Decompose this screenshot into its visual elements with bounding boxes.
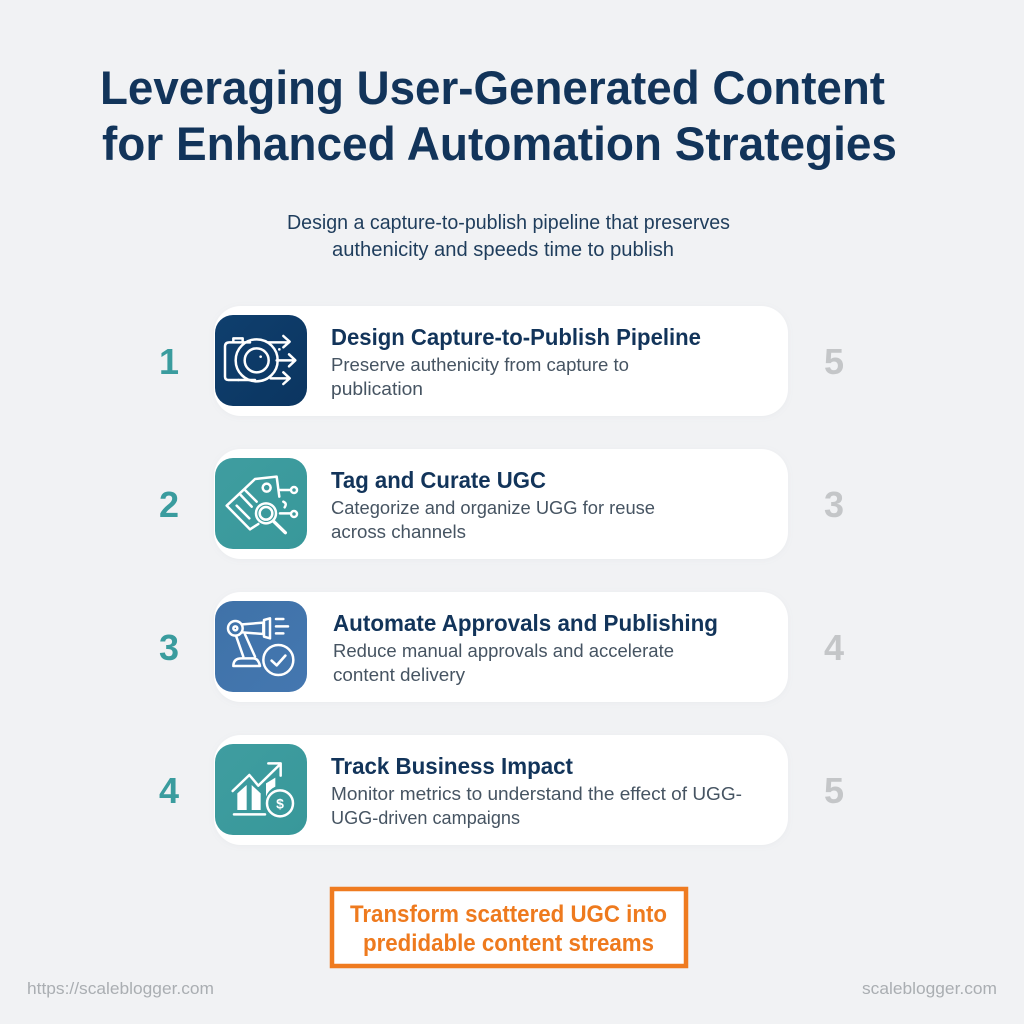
step row 2	[159, 449, 844, 559]
card 2 text: Tag and Curate UGC	[331, 467, 546, 493]
title: Leveraging User-Generated Content	[100, 61, 885, 114]
title	[100, 61, 897, 170]
card 2 text	[331, 467, 655, 542]
left number 3: 3	[159, 627, 179, 668]
card 3 text: Automate Approvals and Publishing	[333, 610, 718, 636]
right number 3: 3	[824, 484, 844, 525]
callout: Transform scattered UGC into	[350, 901, 667, 928]
card 3 text	[333, 610, 718, 685]
right number 5: 5	[824, 341, 844, 382]
card 2 text: across channels	[331, 522, 466, 542]
card 1 text: publication	[331, 379, 423, 399]
icon: camera with arrows	[215, 315, 307, 406]
left number 2: 2	[159, 484, 179, 525]
icon: growth chart with dollar coin	[215, 744, 307, 835]
step row 1	[159, 306, 844, 416]
card 3 background	[214, 592, 788, 702]
card 1 text: Preserve authenicity from capture to	[331, 355, 629, 375]
left number 4: 4	[159, 770, 179, 811]
card 1 text	[331, 324, 701, 399]
card 4 text	[331, 753, 742, 828]
card 4 background	[214, 735, 788, 845]
callout	[332, 889, 686, 966]
icon: tag with magnifier	[215, 458, 307, 549]
card 2 background	[214, 449, 788, 559]
right number 5: 5	[824, 770, 844, 811]
card 4 text: Track Business Impact	[331, 753, 573, 779]
step row 3	[159, 592, 844, 702]
icon: robot arm with check	[215, 601, 307, 692]
card 4 text: Monitor metrics to understand the effect of UGG-	[331, 784, 742, 804]
subtitle: authenicity and speeds time to publish	[332, 239, 674, 261]
footer url right: scaleblogger.com	[862, 979, 997, 998]
footer url left: https://scaleblogger.com	[27, 979, 214, 998]
step row 4	[159, 735, 844, 845]
callout: predidable content streams	[363, 930, 654, 957]
left number 1: 1	[159, 341, 179, 382]
icon: growth chart with dollar coin: $	[276, 795, 284, 811]
card 3 text: Reduce manual approvals and accelerate	[333, 641, 674, 661]
title: for Enhanced Automation Strategies	[102, 117, 897, 170]
card 3 text: content delivery	[333, 665, 465, 685]
card 2 text: Categorize and organize UGG for reuse	[331, 498, 655, 518]
subtitle	[287, 212, 730, 261]
right number 4: 4	[824, 627, 844, 668]
card 4 text: UGG-driven campaigns	[331, 808, 520, 828]
card 1 text: Design Capture-to-Publish Pipeline	[331, 324, 701, 350]
card 1 background	[214, 306, 788, 416]
subtitle: Design a capture-to-publish pipeline that preserves	[287, 212, 730, 234]
